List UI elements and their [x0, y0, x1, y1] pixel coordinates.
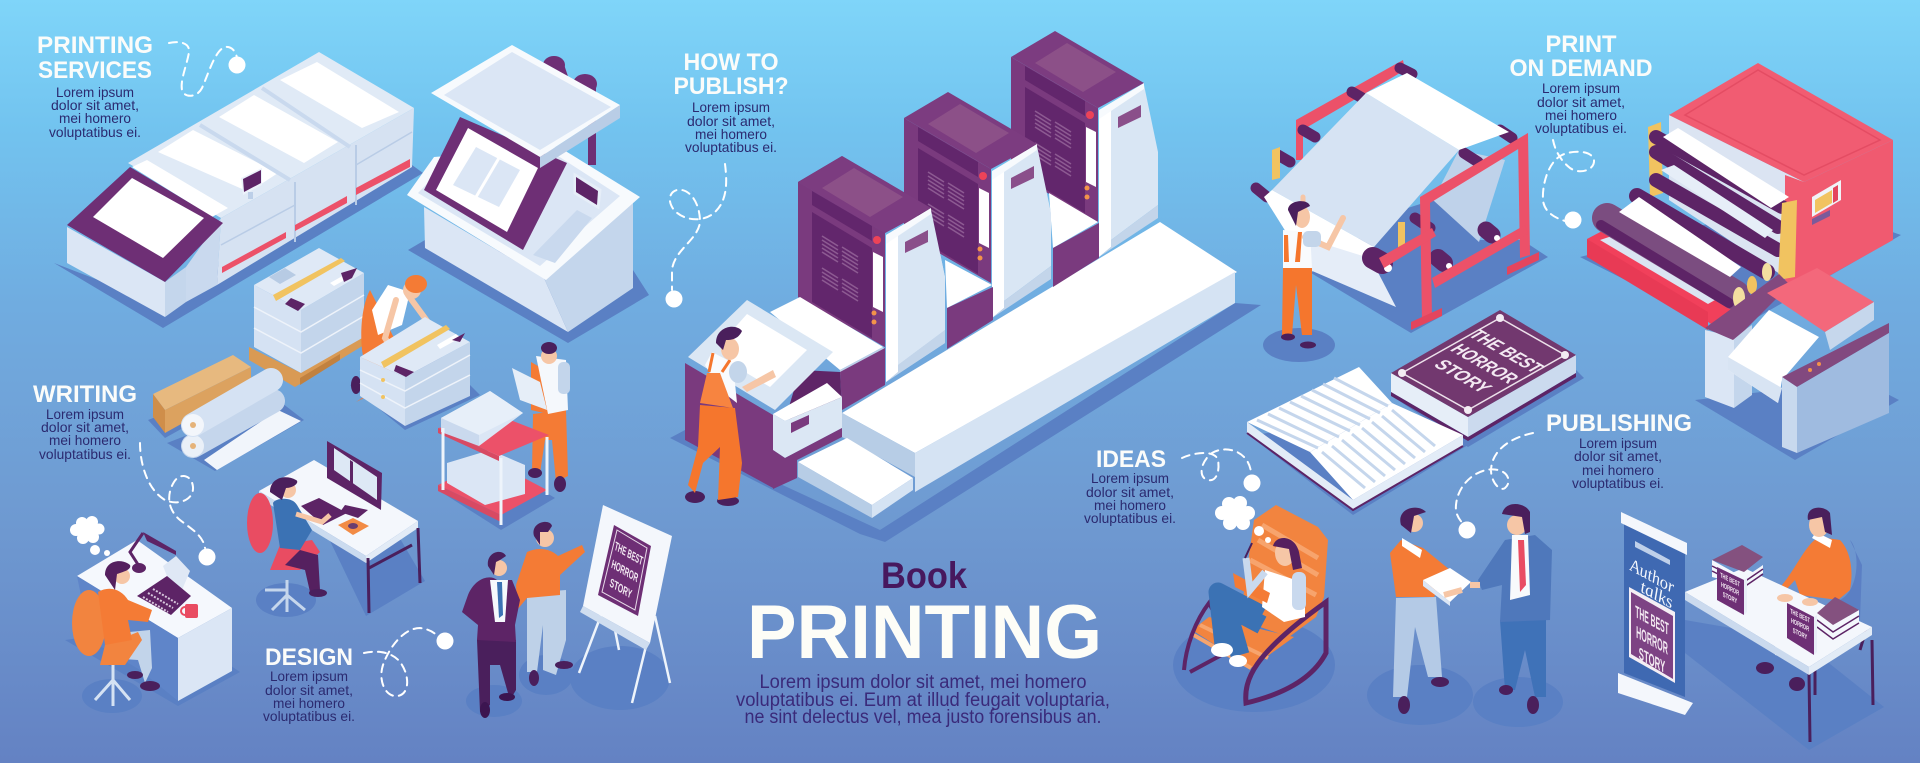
illustration: offset printing press — [670, 156, 1261, 542]
title: book printing: Book — [881, 555, 967, 596]
press tower three — [798, 156, 945, 382]
book cover text: THE BEST — [1463, 327, 1549, 376]
text block: writing: Lorem ipsum — [46, 406, 124, 422]
book cover text: HORROR — [1445, 342, 1523, 387]
standing book text: STORY — [1723, 591, 1737, 606]
text block: printing services — [37, 32, 153, 140]
text block: printing services: voluptatibus ei. — [49, 124, 141, 140]
text block: how to publish: dolor sit amet, — [687, 113, 775, 129]
text block: publishing: voluptatibus ei. — [1572, 475, 1664, 491]
connector: ideas — [1182, 449, 1260, 492]
text block: design — [263, 644, 355, 724]
standing book text: HORROR — [1721, 582, 1739, 597]
standing book text: HORROR — [1791, 618, 1809, 633]
icon: thought cloud writing — [70, 516, 110, 556]
text block: how to publish: mei homero — [695, 126, 767, 142]
text block: design: Lorem ipsum — [270, 668, 348, 684]
book stack right — [1787, 597, 1859, 655]
text block: writing — [33, 381, 137, 462]
standing book text — [1720, 572, 1740, 607]
text block: print on demand: ON DEMAND — [1510, 55, 1652, 82]
book cover text: STORY — [1428, 357, 1497, 396]
illustration: long box and paper rolls — [148, 355, 304, 471]
connector: publishing — [1456, 433, 1533, 538]
standing book text: STORY — [1793, 627, 1807, 642]
banner script text: talks — [1641, 576, 1672, 614]
title: book printing: voluptatibus ei. Eum at illud feugait voluptaria, — [736, 690, 1110, 711]
poster title text — [605, 539, 645, 603]
press towers repeated — [798, 31, 1158, 382]
text block: design: DESIGN — [265, 644, 353, 671]
illustration: cart with red shelves — [438, 391, 555, 530]
illustration: author and publisher handshake — [1367, 504, 1563, 727]
illustration: writing desk and person at typewriter — [65, 532, 240, 713]
illustration: design desk and person — [247, 441, 425, 617]
connector: printing services — [169, 42, 246, 96]
icon: thought cloud ideas — [1215, 496, 1271, 543]
text block: how to publish: Lorem ipsum — [692, 99, 770, 115]
text block: design: mei homero — [273, 695, 345, 711]
text block: publishing: Lorem ipsum — [1579, 435, 1657, 451]
poster title text: STORY — [608, 575, 633, 601]
poster title text: HORROR — [610, 557, 640, 585]
illustration: printing services machine two — [407, 45, 649, 343]
text block: ideas: mei homero — [1094, 497, 1166, 513]
banner script text: Author — [1628, 553, 1674, 599]
illustration: author talks roll-up banner: HORROR — [1636, 622, 1668, 659]
text block: print on demand: voluptatibus ei. — [1535, 120, 1627, 136]
illustration: small red paper machine — [1695, 268, 1899, 460]
text block: publishing: dolor sit amet, — [1574, 448, 1662, 464]
book stack left — [1712, 545, 1763, 615]
book cover text — [1420, 327, 1549, 401]
text block: print on demand: dolor sit amet, — [1537, 94, 1625, 110]
standing book text: THE BEST — [1720, 572, 1740, 589]
text block: ideas: IDEAS — [1096, 446, 1166, 473]
illustration: book signing table — [1685, 508, 1884, 750]
text block: how to publish — [674, 49, 788, 155]
text block: print on demand: mei homero — [1545, 107, 1617, 123]
text block: printing services: dolor sit amet, — [51, 97, 139, 113]
text block: design: dolor sit amet, — [265, 682, 353, 698]
text block: printing services: SERVICES — [38, 57, 152, 84]
text block: ideas — [1084, 446, 1176, 526]
illustration: closed book — [1391, 310, 1584, 447]
connector: writing — [140, 443, 216, 566]
press operator worker — [685, 327, 776, 506]
connector: design — [364, 628, 454, 696]
poster title text: THE BEST — [613, 539, 645, 568]
text block: printing services: Lorem ipsum — [56, 84, 134, 100]
text block: writing: voluptatibus ei. — [39, 446, 131, 462]
connector: print on demand — [1543, 140, 1594, 228]
text block: publishing: mei homero — [1582, 462, 1654, 478]
text block: print on demand: Lorem ipsum — [1542, 80, 1620, 96]
title: book printing — [736, 555, 1110, 728]
standing book text: THE BEST — [1790, 608, 1810, 625]
text block: ideas: voluptatibus ei. — [1084, 510, 1176, 526]
illustration: second box stack — [360, 317, 470, 426]
banner poster text: STORY — [1639, 644, 1665, 677]
text block: print on demand: PRINT — [1546, 31, 1617, 58]
text block: printing services: mei homero — [59, 110, 131, 126]
banner script text — [1628, 553, 1674, 615]
text block: publishing: PUBLISHING — [1546, 410, 1692, 437]
text block: how to publish: HOW TO — [684, 49, 778, 76]
text block: writing: dolor sit amet, — [41, 419, 129, 435]
press platform — [798, 222, 1237, 518]
text block: design: voluptatibus ei. — [263, 708, 355, 724]
illustration: paper roll frame — [1256, 60, 1548, 333]
press feeder — [685, 297, 885, 489]
text block: writing: WRITING — [33, 381, 137, 408]
illustration: worker with paper plan — [512, 342, 570, 492]
illustration: woman reading in rocking chair — [1173, 505, 1335, 712]
text block: print on demand — [1510, 31, 1652, 136]
text block: how to publish: voluptatibus ei. — [685, 139, 777, 155]
illustration: paper box stack on pallet — [249, 248, 364, 387]
standing book text — [1790, 608, 1810, 643]
connector: how to publish — [666, 164, 726, 308]
illustration: worker with orange cap packing boxes — [350, 275, 480, 430]
title: book printing: ne sint delectus vel, mea justo forensibus an. — [744, 707, 1102, 728]
title: book printing: Lorem ipsum dolor sit amet, mei homero — [760, 672, 1086, 693]
illustration: open book — [1247, 367, 1468, 515]
illustration: author talks roll-up banner: THE BEST — [1635, 602, 1669, 639]
illustration: worker at paper roll — [1263, 197, 1343, 362]
text block: how to publish: PUBLISH? — [674, 73, 788, 100]
text block: ideas: Lorem ipsum — [1091, 470, 1169, 486]
text block: ideas: dolor sit amet, — [1086, 484, 1174, 500]
text block: printing services: PRINTING — [37, 32, 153, 59]
illustration: two men at flip chart — [462, 505, 672, 718]
text block: publishing — [1546, 410, 1692, 491]
illustration: author talks roll-up banner — [1618, 512, 1693, 715]
illustration: red print on demand machine — [1580, 63, 1901, 333]
illustration: printing services machine one — [54, 52, 423, 328]
title: book printing: PRINTING — [747, 590, 1102, 675]
banner poster text — [1635, 602, 1669, 679]
text block: writing: mei homero — [49, 432, 121, 448]
